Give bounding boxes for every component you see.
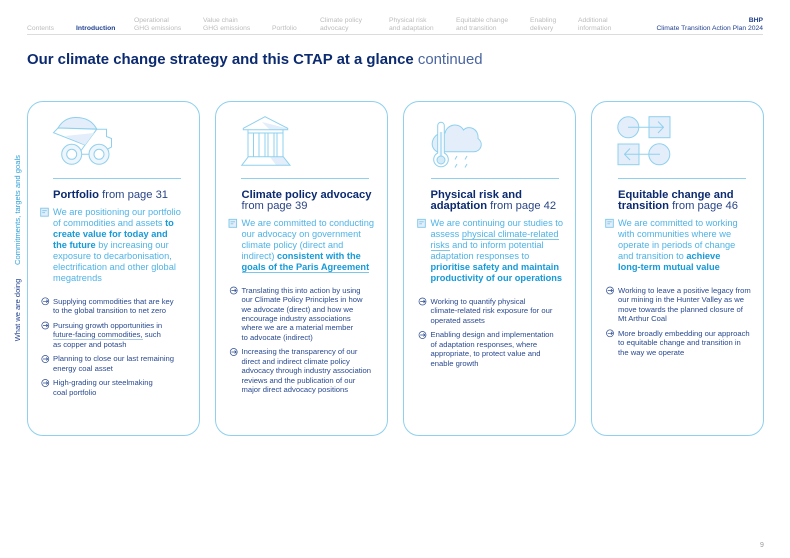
- bullet: pursuing growth: as copper and potash: [53, 340, 126, 348]
- navigation bar: [27, 16, 763, 32]
- bullet: increasing transparency: advocacy through industry association: [242, 366, 371, 375]
- text: equitable change commitment: with communities where we: [618, 229, 731, 239]
- report name: BHP: [749, 16, 763, 24]
- bullet: closing energy coal: energy coal asset: [53, 364, 113, 373]
- bullet: embedding approach: [618, 329, 750, 356]
- bullet: enabling design: Enabling design and implementation: [430, 330, 554, 339]
- bullet: quantifying risk: climate-related risk exposure for our: [430, 306, 552, 315]
- bullet: quantifying risk: [430, 297, 552, 324]
- bullet: quantifying risk: operated assets: [430, 316, 485, 324]
- text: portfolio commitment: the future by increasing our: [53, 240, 169, 250]
- nav: Enabling delivery: Enabling: [530, 16, 556, 24]
- text: physical risk commitment: prioritise safety and maintain: [430, 262, 559, 272]
- nav: Contents: Contents: [27, 24, 54, 32]
- text: portfolio commitment: exposure to decarbonisation,: [53, 251, 172, 261]
- nav: Equitable change and transition: and transition: [456, 24, 497, 32]
- text: advocacy commitment: We are committed to conducting: [242, 218, 374, 228]
- bullet: increasing transparency: major direct advocacy positions: [242, 385, 348, 394]
- text: advocacy commitment: our advocacy on government: [242, 229, 361, 239]
- bullet: supplying commodities: Supplying commodities that are key: [53, 296, 174, 306]
- heading: equitable change and transition: Equitable change and: [618, 189, 734, 201]
- report name: Climate Transition Action Plan 2024: [656, 24, 763, 32]
- bullet: translating into action: to advocate (indirect): [242, 333, 313, 342]
- bullet: embedding approach: the way we operate: [618, 348, 684, 356]
- heading: physical risk and adaptation: adaptation from page 42: [430, 200, 556, 212]
- bullet: translating into action: [242, 286, 363, 342]
- nav: Equitable change and transition: [456, 16, 508, 32]
- bullet: enabling design: enable growth: [430, 359, 479, 368]
- bullet: high-grading steelmaking: [53, 378, 153, 397]
- bullet: supplying commodities: [53, 296, 174, 315]
- text: advocacy commitment: goals of the Paris Agreement: [242, 262, 369, 272]
- text: physical risk commitment: adaptation responses to: [430, 251, 529, 261]
- nav: Equitable change and transition: Equitable change: [456, 16, 508, 24]
- heading: equitable change and transition: [618, 189, 738, 212]
- bullet: increasing transparency: direct and indirect climate policy: [242, 357, 350, 366]
- nav: Additional information: Additional: [578, 16, 608, 24]
- bullet: pursuing growth: [53, 321, 162, 348]
- bullet: translating into action: encourage industry associations: [242, 314, 351, 323]
- side tab: commitments, targets and goals: Commitments, targets and goals: [12, 155, 22, 265]
- text: portfolio commitment: megatrends: [53, 273, 102, 283]
- bullet: closing energy coal: Planning to close our last remaining: [53, 354, 174, 363]
- heading: portfolio: Portfolio from page 31: [53, 189, 168, 201]
- nav: Physical risk and adaptation: Physical risk: [389, 16, 427, 24]
- bullet: translating into action: where we are a material member: [242, 323, 353, 332]
- bullet: enabling design: appropriate, to protect value and: [430, 349, 541, 358]
- text: portfolio commitment: [53, 207, 181, 283]
- bullet: positive legacy: our mining in the Hunter Valley as we: [618, 295, 744, 304]
- bullet: enabling design: [430, 330, 554, 368]
- nav: Climate policy advocacy: Climate policy: [320, 16, 362, 24]
- bullet: embedding approach: More broadly embedding our approach: [618, 329, 750, 338]
- side tab: what we are doing: What we are doing: [12, 279, 22, 341]
- bullet: positive legacy: Mt Arthur Coal: [618, 314, 667, 323]
- bullet: translating into action: we advocate (direct) and how we: [242, 304, 353, 314]
- nav: Value chain GHG emissions: [203, 16, 250, 32]
- nav: Operational GHG emissions: Operational: [134, 16, 169, 24]
- text: physical risk commitment: productivity of our operations: [430, 273, 562, 283]
- text: equitable change commitment: operate in periods of change: [618, 240, 735, 250]
- nav: Physical risk and adaptation: and adaptation: [389, 24, 434, 32]
- nav: Climate policy advocacy: [320, 16, 362, 32]
- panel: portfolio: [27, 101, 200, 436]
- bullet: positive legacy: move towards the planned closure of: [618, 304, 743, 314]
- bullet: positive legacy: [618, 286, 751, 323]
- text: physical risk commitment: [430, 218, 563, 283]
- bullet: increasing transparency: Increasing the transparency of our: [242, 347, 357, 356]
- nav: Introduction: Introduction: [76, 24, 115, 32]
- heading: physical risk and adaptation: Physical risk and: [430, 189, 522, 201]
- heading: climate policy advocacy: from page 39: [242, 200, 307, 212]
- page number: 9: [760, 542, 764, 549]
- nav: Enabling delivery: delivery: [530, 24, 553, 32]
- text: physical risk commitment: risks and to inform potential: [430, 240, 544, 250]
- panel: equitable change and transition: [591, 101, 764, 436]
- text: portfolio commitment: We are positioning our portfolio: [53, 207, 181, 217]
- divider lines: [53, 178, 746, 179]
- bullet: embedding approach: to equitable change and transition in: [618, 338, 741, 347]
- bullet: pursuing growth: future-facing commodities, such: [53, 330, 161, 339]
- bullet: translating into action: Translating this into action by using: [242, 286, 361, 295]
- heading: equitable change and transition: transition from page 46: [618, 200, 738, 212]
- text: physical risk commitment: We are continuing our studies to: [430, 218, 563, 228]
- nav: Physical risk and adaptation: [389, 16, 434, 32]
- text: equitable change commitment: We are committed to working: [618, 218, 738, 228]
- text: equitable change commitment: [618, 218, 738, 272]
- text: equitable change commitment: long-term mutual value: [618, 262, 720, 272]
- text: advocacy commitment: indirect) consistent with the: [242, 251, 361, 261]
- text: portfolio commitment: of commodities and assets to: [53, 218, 174, 228]
- bullet: increasing transparency: reviews and the publication of our: [242, 376, 355, 385]
- bullet: supplying commodities: to the global transition to net zero: [53, 306, 166, 315]
- bullet: quantifying risk: Working to quantify physical: [430, 297, 526, 306]
- nav: Value chain GHG emissions: GHG emissions: [203, 24, 250, 32]
- nav: Additional information: information: [578, 24, 611, 32]
- bullet: positive legacy: Working to leave a positive legacy from: [618, 286, 751, 295]
- heading: climate policy advocacy: Climate policy advocacy: [242, 189, 371, 201]
- text: physical risk commitment: assess physical climate-related: [430, 229, 559, 239]
- title: Our climate change strategy and this CTAP at a glance continued: [27, 51, 483, 68]
- nav: Portfolio: Portfolio: [272, 24, 297, 32]
- nav: Operational GHG emissions: GHG emissions: [134, 24, 181, 32]
- bullet: translating into action: our Climate Policy Principles in how: [242, 295, 363, 304]
- bullet: pursuing growth: Pursuing growth opportunities in: [53, 321, 162, 330]
- nav: Value chain GHG emissions: Value chain: [203, 16, 238, 24]
- bullet: high-grading steelmaking: High-grading our steelmaking: [53, 378, 153, 387]
- text: portfolio commitment: create value for today and: [53, 229, 168, 239]
- nav: Climate policy advocacy: advocacy: [320, 24, 349, 32]
- text: advocacy commitment: climate policy (direct and: [242, 240, 343, 250]
- report name: [656, 16, 763, 32]
- bullet: high-grading steelmaking: coal portfolio: [53, 388, 96, 397]
- bullet: increasing transparency: [242, 347, 371, 394]
- nav: Enabling delivery: [530, 16, 556, 32]
- text: advocacy commitment: [242, 218, 374, 273]
- bullet: closing energy coal: [53, 354, 174, 373]
- bullet: enabling design: of adaptation responses, where: [430, 340, 537, 349]
- nav: Additional information: [578, 16, 611, 32]
- text: equitable change commitment: and transition to achieve: [618, 251, 720, 261]
- text: portfolio commitment: electrification and other global: [53, 262, 176, 272]
- panel: physical risk and adaptation: [403, 101, 576, 436]
- panel: climate policy advocacy: [215, 101, 388, 436]
- heading: physical risk and adaptation: [430, 189, 556, 212]
- heading: climate policy advocacy: [242, 189, 372, 212]
- nav: Operational GHG emissions: [134, 16, 181, 32]
